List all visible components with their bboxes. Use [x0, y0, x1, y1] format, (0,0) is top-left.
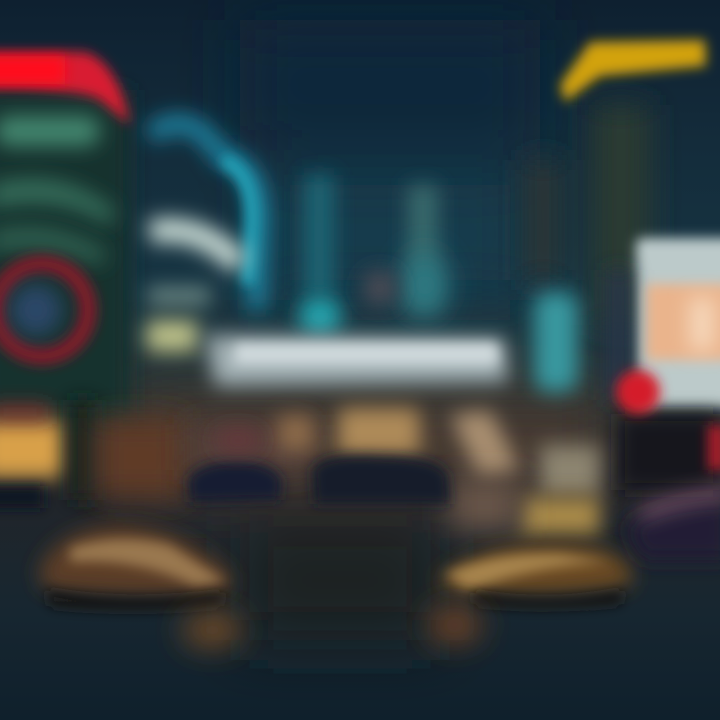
right sign group	[534, 40, 706, 392]
orange lower sign	[0, 420, 64, 478]
billboard picture	[646, 284, 720, 360]
tower side	[606, 270, 630, 400]
yellow-green block	[146, 320, 198, 352]
left building with signs	[0, 52, 130, 508]
dark gap	[70, 400, 95, 500]
foreground taxi left	[38, 525, 242, 648]
centre towers	[298, 175, 447, 336]
car left	[188, 461, 282, 502]
building body	[0, 90, 130, 420]
car right purple	[625, 500, 720, 560]
red ring sign	[0, 264, 88, 356]
centre-left blue building	[146, 124, 260, 352]
taxi body	[38, 525, 232, 596]
dark base	[618, 414, 720, 490]
white sign bars	[150, 230, 240, 265]
billboard frame	[636, 238, 720, 408]
right billboard	[606, 238, 720, 490]
dark road and buildings	[130, 20, 610, 640]
street level lights	[95, 408, 600, 535]
blue neon arc	[150, 124, 260, 310]
teal side panel	[534, 292, 578, 392]
distant dark cars	[188, 428, 720, 560]
taxi reflection	[182, 612, 242, 648]
car centre	[312, 455, 450, 504]
green sign bars	[0, 116, 100, 146]
dim red glow	[362, 270, 398, 306]
right side storefronts	[450, 410, 520, 480]
red light	[616, 370, 660, 414]
teal tower	[304, 175, 334, 295]
taxi reflection	[427, 605, 483, 645]
amber window centre	[338, 408, 420, 456]
taxi body	[438, 544, 632, 594]
right dark tower	[525, 105, 650, 325]
red sign	[0, 52, 130, 125]
yellow sign	[560, 40, 706, 102]
central white marquee band	[205, 335, 508, 386]
grey teal tower	[408, 185, 438, 310]
brown storefronts	[95, 418, 185, 498]
foreground taxi right	[427, 544, 632, 645]
